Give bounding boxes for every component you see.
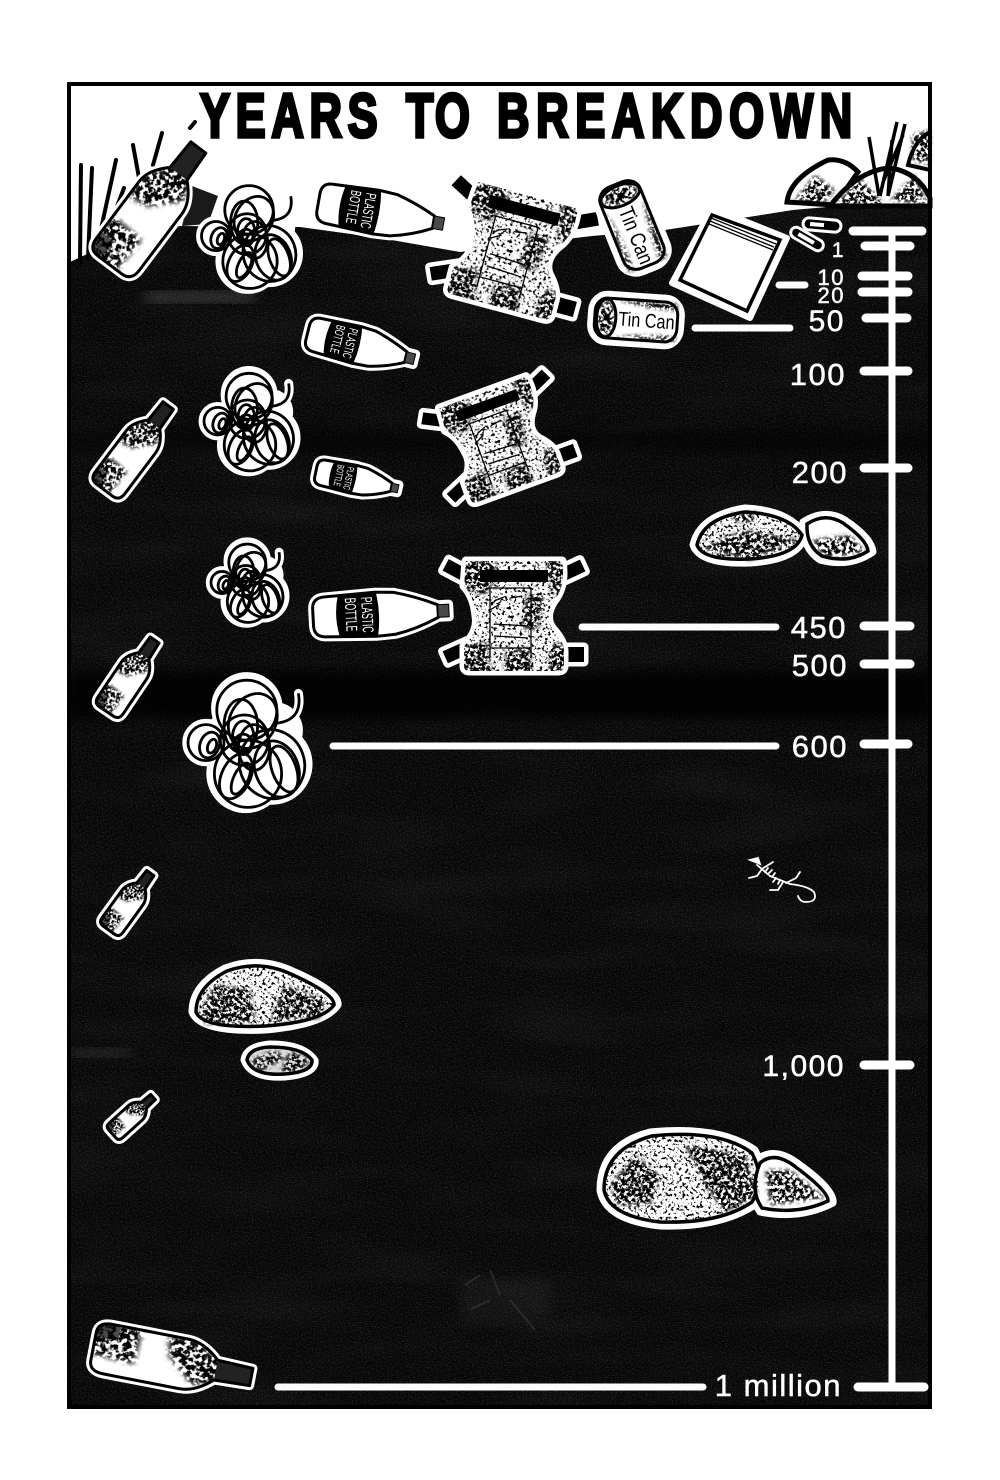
tick: 20 (818, 283, 908, 308)
tick: 1 (832, 239, 910, 262)
plastic bottle: 450 years: BOTTLE (341, 597, 361, 632)
rock pair: large (600, 1130, 833, 1226)
panel: underground soil (68, 190, 932, 1410)
tick: 450: 450 (791, 610, 847, 645)
tick: 500 (792, 648, 910, 683)
scale axis (715, 228, 924, 1403)
tin can: surface: Tin Can (614, 203, 658, 268)
plastic bottle: 200 years small: BOTTLE (331, 464, 347, 487)
spaghetti tangle: 600 years (187, 677, 314, 809)
tick: 1: 1 (832, 239, 845, 262)
diaper: 200 years (417, 366, 583, 514)
plastic bottle: 100 years (303, 314, 419, 378)
tick: 100: 100 (790, 357, 846, 392)
glass bottle: 700 years (95, 863, 162, 940)
tick: 450 (791, 610, 910, 645)
tick: 200: 200 (792, 455, 848, 490)
plastic bottle: 200 years small (313, 457, 401, 503)
textured stub behind spaghetti (182, 186, 218, 226)
tick: 1,000: 1,000 (762, 1050, 845, 1083)
plastic bottle: surface: BOTTLE (343, 189, 364, 225)
lizard skeleton (749, 858, 815, 902)
plastic bottle: 100 years: BOTTLE (327, 323, 347, 355)
tin can: buried: Tin Can (618, 309, 675, 335)
diaper: 450 years (443, 558, 585, 674)
paperclips (789, 217, 841, 253)
tick: 500: 500 (792, 648, 848, 683)
tin can: buried (591, 294, 681, 346)
rock pair: 300 years (693, 508, 873, 563)
plastic bottle: surface (315, 180, 447, 246)
spaghetti tangle: 400 years (210, 542, 289, 623)
plastic bottle: surface: PLASTIC (357, 192, 379, 230)
glass bottle: 500 years (89, 628, 168, 723)
tick: 600: 600 (792, 729, 848, 764)
title: YEARS (200, 82, 378, 151)
leader lines (278, 285, 805, 1387)
faint buried marks (465, 1270, 535, 1330)
tick: 1 million: 1 million (715, 1368, 842, 1403)
tick: 10: 10 (818, 265, 845, 290)
glass bottle: surface (81, 126, 222, 286)
tick: 50: 50 (809, 305, 845, 338)
glass bottle: 200 years (84, 391, 184, 505)
spaghetti tangle: surface (201, 183, 304, 289)
plastic bottle: 450 years (312, 588, 450, 640)
spaghetti tangle: 200 years (203, 371, 301, 472)
plastic bottle: 100 years: PLASTIC (339, 327, 359, 360)
glass bottle: 900 years (102, 1087, 160, 1143)
frame (69, 84, 930, 1407)
title: BREAKDOWN (497, 82, 852, 151)
title (200, 82, 852, 151)
tick: 50 (809, 305, 907, 338)
tick: 20: 20 (818, 283, 845, 308)
glass bottle: 1 million years (82, 1315, 260, 1402)
tin can: surface (592, 173, 672, 277)
tick: 200 (792, 455, 908, 490)
surface tick (853, 226, 922, 236)
plastic bag (672, 208, 787, 318)
tick: 100 (790, 357, 908, 392)
large rock: 800 years (192, 962, 338, 1030)
grass: left (80, 122, 195, 262)
rocks on surface right (787, 122, 930, 206)
plastic bottle: 450 years: PLASTIC (358, 596, 377, 633)
plastic bottle: 200 years small: PLASTIC (341, 466, 357, 491)
small rock: 800 years (243, 1043, 316, 1078)
diaper: surface (423, 172, 603, 330)
tick: 10 (818, 265, 908, 290)
title: TO (406, 82, 470, 151)
tick: 600 (792, 729, 908, 764)
